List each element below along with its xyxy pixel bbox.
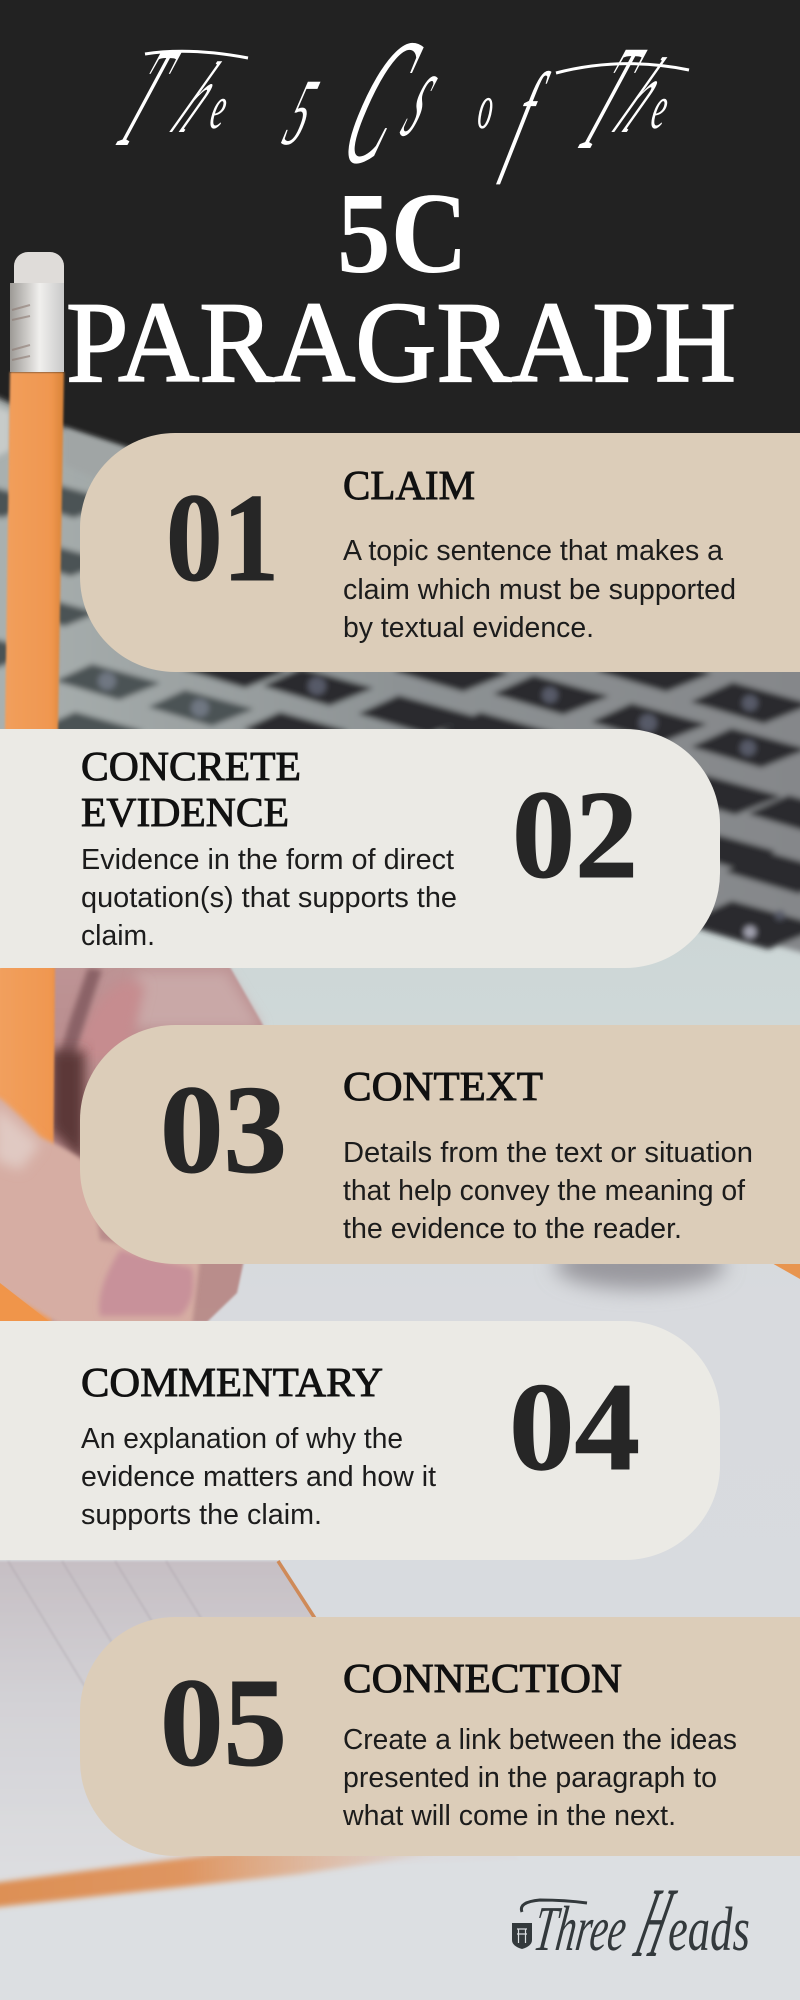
script line: The 5Cs of The: h: [153, 42, 244, 155]
script line: The 5Cs of The: h: [594, 37, 690, 156]
icon: shield: [512, 1923, 532, 1949]
number 03: 03: [160, 1061, 287, 1200]
number 01: 01: [166, 469, 279, 608]
logo: Three Heads: eads: [668, 1895, 750, 1964]
text: evidence description: quotation(s) that supports the: [81, 882, 457, 914]
heading: PARAGRAPH: PARAGRAPH: [66, 279, 736, 406]
heading: context: CONTEXT: [343, 1063, 543, 1109]
panel: 04 commentary: [0, 1321, 720, 1560]
keyboard: [0, 375, 800, 960]
number 04: 04: [509, 1358, 640, 1497]
text: evidence description: [81, 844, 457, 952]
heading: concrete evidence: EVIDENCE: [81, 789, 289, 835]
heading: 5C: 5C: [337, 170, 468, 298]
panel: 02 concrete evidence: [0, 729, 720, 968]
text: connection description: [342, 1724, 737, 1832]
text: context description: [343, 1137, 753, 1245]
script line: The 5Cs of The: [97, 3, 690, 202]
number 02: 02: [512, 766, 638, 905]
script line: The 5Cs of The: T: [558, 16, 664, 181]
script line: The 5Cs of The: o: [474, 70, 498, 142]
pencil: [0, 252, 200, 1325]
text: commentary description: An explanation of why the: [81, 1423, 403, 1455]
logo: Three Heads: [512, 1867, 750, 1978]
logo: Three Heads: H: [625, 1867, 685, 1978]
text: claim description: A topic sentence that makes a: [343, 535, 724, 567]
text: connection description: Create a link between the ideas: [343, 1724, 737, 1756]
number 05: 05: [160, 1654, 287, 1793]
script line: The 5Cs of The: e: [205, 73, 233, 142]
script line: The 5Cs of The: f: [495, 49, 559, 186]
panel: 01 claim: [80, 433, 800, 672]
text: claim description: claim which must be supported: [343, 574, 736, 606]
text: commentary description: supports the claim.: [81, 1499, 322, 1531]
script line: The 5Cs of The: 5: [272, 59, 330, 165]
text: claim description: [343, 535, 736, 644]
script line: The 5Cs of The: T: [97, 18, 198, 176]
title: [66, 3, 736, 406]
hand: [40, 960, 263, 1322]
script line: The 5Cs of The: e: [646, 73, 674, 142]
script line: The 5Cs of The: s: [385, 24, 464, 162]
script line: The 5Cs of The: C: [320, 3, 442, 202]
text: evidence description: claim.: [81, 920, 155, 952]
logo: Three Heads: Three: [530, 1893, 631, 1964]
text: context description: the evidence to the reader.: [343, 1213, 682, 1245]
text: connection description: what will come in the next.: [342, 1800, 676, 1832]
heading: concrete evidence: CONCRETE: [81, 743, 301, 789]
text: claim description: by textual evidence.: [343, 612, 594, 644]
heading: claim: CLAIM: [343, 462, 475, 508]
heading: commentary: COMMENTARY: [81, 1359, 383, 1405]
text: context description: Details from the text or situation: [343, 1137, 753, 1169]
text: evidence description: Evidence in the form of direct: [81, 844, 454, 876]
text: commentary description: [81, 1423, 436, 1531]
text: context description: that help convey the meaning of: [343, 1175, 746, 1207]
panel: 05 connection: [80, 1617, 800, 1856]
text: commentary description: evidence matters and how it: [81, 1461, 436, 1493]
text: connection description: presented in the paragraph to: [343, 1762, 717, 1794]
heading: connection: CONNECTION: [343, 1655, 622, 1701]
heading: concrete evidence: [81, 743, 301, 835]
panel: 03 context: [80, 1025, 800, 1264]
